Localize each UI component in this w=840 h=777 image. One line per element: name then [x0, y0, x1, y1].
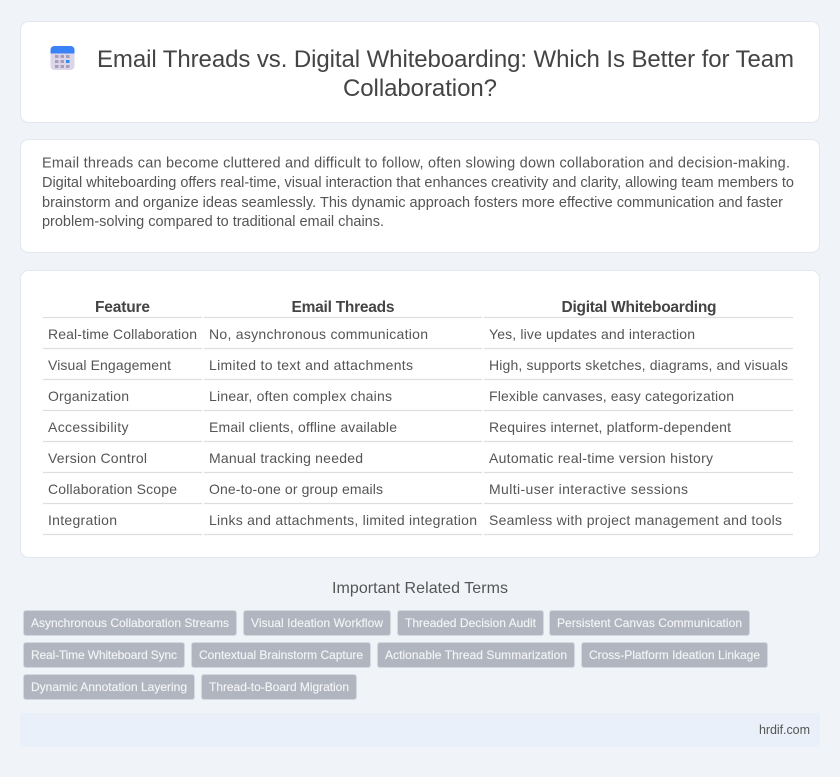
tag: [378, 642, 574, 668]
table header: Feature: [95, 299, 150, 316]
tag: [24, 674, 194, 700]
row: real-time collaboration: No, asynchronous communication: [209, 326, 428, 342]
tag: [550, 610, 750, 636]
table header: Email Threads: [292, 299, 394, 316]
panel: comparison table: [20, 270, 820, 558]
tag: [582, 642, 768, 668]
row: organization: Linear, often complex chains: [209, 388, 392, 404]
tag: [192, 642, 370, 668]
row: collaboration scope: One-to-one or group emails: [209, 481, 383, 497]
title: Collaboration?: [343, 75, 497, 102]
table header: Digital Whiteboarding: [562, 299, 716, 316]
tag: [244, 610, 390, 636]
intro text: Digital whiteboarding offers real-time, visual interaction that enhances creativity and clarity, allowing team members to: [42, 175, 794, 191]
tag: Real-Time Whiteboard Sync: [31, 648, 177, 662]
row: version control: Manual tracking needed: [209, 450, 363, 466]
row: visual engagement: [48, 357, 788, 373]
icon: calendar: [50, 46, 74, 70]
tag: [24, 642, 184, 668]
tag: Cross-Platform Ideation Linkage: [589, 648, 760, 662]
row: accessibility: Email clients, offline available: [209, 419, 397, 435]
row: accessibility: [48, 419, 731, 435]
table header: [95, 299, 716, 316]
tag: Visual Ideation Workflow: [251, 616, 383, 630]
row: version control: Automatic real-time version history: [489, 450, 713, 466]
title: [97, 46, 794, 102]
row: integration: Links and attachments, limited integration: [209, 512, 477, 528]
title: Email Threads vs. Digital Whiteboarding: Which Is Better for Team: [97, 46, 794, 73]
tag: Contextual Brainstorm Capture: [199, 648, 363, 662]
intro text: problem-solving compared to traditional email chains.: [42, 214, 384, 230]
row: visual engagement: Limited to text and attachments: [209, 357, 413, 373]
row: collaboration scope: [48, 481, 688, 497]
row: integration: [48, 512, 782, 528]
tag: [24, 610, 236, 636]
row: accessibility: Accessibility: [48, 419, 128, 435]
row: version control: [48, 450, 713, 466]
heading: important related terms: Important Related Terms: [332, 580, 508, 597]
row: organization: Organization: [48, 388, 129, 404]
intro text: brainstorm and organize ideas seamlessly. This dynamic approach fosters more effective communication and faster: [42, 195, 783, 211]
row: visual engagement: Visual Engagement: [48, 357, 171, 373]
footer: [20, 713, 820, 747]
row: real-time collaboration: Real-time Collaboration: [48, 326, 197, 342]
tag: [202, 674, 356, 700]
row: integration: Integration: [48, 512, 117, 528]
row: real-time collaboration: [48, 326, 695, 342]
row: visual engagement: High, supports sketches, diagrams, and visuals: [489, 357, 788, 373]
row: accessibility: Requires internet, platform-dependent: [489, 419, 731, 435]
row: version control: Version Control: [48, 450, 147, 466]
panel: title header: [20, 22, 820, 122]
panel: introduction: [20, 140, 820, 252]
row: organization: [48, 388, 734, 404]
tag: Persistent Canvas Communication: [557, 616, 742, 630]
row: real-time collaboration: Yes, live updates and interaction: [489, 326, 695, 342]
tag: Thread-to-Board Migration: [209, 680, 349, 694]
intro text: [42, 156, 794, 230]
row: organization: Flexible canvases, easy categorization: [489, 388, 734, 404]
row: collaboration scope: Collaboration Scope: [48, 481, 177, 497]
tag: Asynchronous Collaboration Streams: [31, 616, 229, 630]
intro text: Email threads can become cluttered and difficult to follow, often slowing down collaboration and decision-making.: [42, 156, 790, 172]
row: collaboration scope: Multi-user interactive sessions: [489, 481, 688, 497]
footer: hrdif.com: [759, 723, 810, 737]
related term tags: [24, 610, 768, 700]
tag: Dynamic Annotation Layering: [31, 680, 187, 694]
tag: [398, 610, 544, 636]
row: integration: Seamless with project management and tools: [489, 512, 782, 528]
tag: Threaded Decision Audit: [405, 616, 537, 630]
tag: Actionable Thread Summarization: [385, 648, 567, 662]
